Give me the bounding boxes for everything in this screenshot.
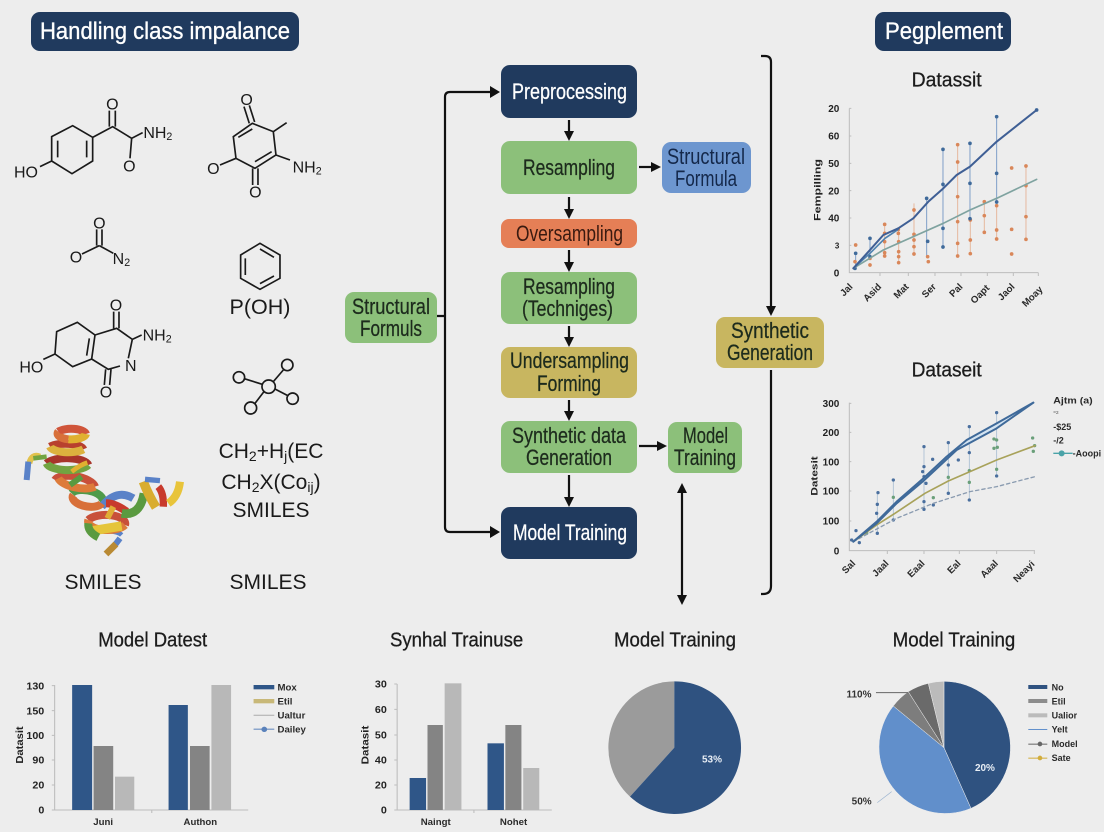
y labels: [823, 399, 840, 557]
x labels: [421, 817, 527, 827]
x labels: Jaol: [996, 282, 1017, 303]
legend: Dailey: [277, 725, 307, 735]
x labels: Oapt: [969, 282, 993, 306]
y labels: 100: [823, 517, 840, 528]
x labels: Eaal: [906, 558, 927, 580]
pie labels: 110%: [846, 689, 872, 700]
box: Synthetic Generation: [716, 317, 824, 368]
chart: Model Datest bars: [15, 628, 307, 827]
label: P(OH): P(OH): [230, 295, 290, 319]
molecule 1: HO: [14, 165, 38, 182]
formula text: 2: [249, 448, 257, 464]
box: Structural Formula: Formula: [675, 166, 738, 191]
back strands: [58, 429, 86, 434]
leader lines: [876, 691, 908, 694]
box: Model Training small: [668, 422, 742, 473]
pie slice: navy: [630, 681, 741, 814]
molecule 1: NH: [143, 125, 166, 142]
front strands: [68, 434, 86, 439]
y labels: 90: [32, 756, 45, 767]
molecule 2: [207, 92, 322, 201]
box: Preprocessing: Preprocessing: [512, 79, 627, 104]
y labels: [375, 680, 387, 817]
label: SMILES left: SMILES: [64, 571, 142, 594]
chart title: Datassit: [912, 69, 982, 92]
band between blue lines: [923, 403, 1033, 481]
y labels: 200: [823, 428, 840, 439]
chart title: Dataseit: [912, 359, 982, 382]
chart: Dataseit scatter line: [810, 359, 1101, 585]
dark blue line: [853, 110, 1037, 268]
x labels: [840, 558, 1037, 585]
molecule 7: protein ribbon: [27, 429, 180, 554]
box: Synthetic Generation: Synthetic: [731, 318, 809, 343]
x labels: Pal: [947, 282, 965, 300]
y labels: 3: [835, 241, 840, 250]
legend: Model: [1052, 739, 1078, 749]
y labels: 20: [828, 186, 840, 197]
box: Preprocessing: [501, 65, 637, 118]
molecule 1: 2: [166, 131, 172, 143]
arrow: Synthetic data to Model Training: [639, 441, 667, 451]
y labels: 0: [834, 546, 840, 557]
axes: [52, 685, 248, 813]
molecule 3: O: [93, 215, 106, 232]
legend: -$25: [1053, 422, 1071, 432]
y labels: 150: [26, 707, 45, 717]
molecule 5: O: [100, 384, 112, 401]
chart title: Model Training: [614, 629, 736, 652]
molecule 5: NH: [143, 328, 166, 345]
box: Resampling (Techniges): [501, 272, 637, 324]
molecule 1: [14, 97, 172, 182]
formula text: +H: [257, 440, 284, 463]
molecule 3: O: [70, 249, 82, 266]
pie slice: gray: [608, 681, 674, 797]
chart: Synhal Trainuse bars: [360, 628, 552, 827]
legend: -Aoopi: [1073, 449, 1101, 459]
y labels: 20: [375, 781, 387, 792]
y labels: 0: [834, 268, 840, 279]
x labels: Aaal: [979, 558, 1001, 581]
legend: -/2: [1053, 435, 1064, 445]
box: Structural Formuls: [345, 292, 437, 343]
title: Handling class impalance: Handling class impalance: [40, 18, 290, 45]
x labels: Mat: [892, 281, 912, 301]
box: Model Training small: Training: [674, 445, 736, 470]
x labels: Ser: [920, 281, 939, 300]
formula text: ij: [307, 479, 314, 495]
formula text: CH: [221, 471, 252, 494]
blue points: [852, 413, 997, 543]
arrow: Resampling to Structural Formula: [639, 162, 661, 172]
x labels: Authon: [184, 817, 217, 827]
label: SMILES right: SMILES: [229, 571, 307, 594]
box: Undersampling Forming: Forming: [537, 371, 601, 396]
molecule 1: O: [123, 159, 136, 176]
heading: Pegplement: Pegplement: [885, 18, 1003, 45]
box: Model Training small: Model: [683, 423, 728, 448]
pie slices: [879, 681, 1010, 813]
x labels: Asid: [862, 282, 884, 304]
heading: Pegplement: [875, 12, 1011, 51]
box: Resampling (Techniges): Resampling: [523, 274, 615, 299]
chart: Datassit scatter line: [813, 69, 1046, 310]
molecule 2: NH: [293, 160, 316, 177]
green points: [867, 438, 1035, 533]
molecule 2: 2: [316, 166, 322, 178]
axes: [849, 108, 1038, 276]
molecule 5: [19, 298, 172, 401]
orange points: [855, 145, 1026, 265]
molecule 3: [70, 215, 130, 269]
legend: Etil: [1052, 696, 1066, 706]
formula text: j: [283, 448, 287, 464]
x labels: [93, 817, 217, 827]
molecule 5: N: [125, 358, 137, 375]
connector: right bracket: [761, 56, 776, 594]
chart: Model Training multi pie: [846, 629, 1078, 813]
box: Structural Formula: [662, 142, 751, 193]
y labels: 30: [375, 680, 387, 691]
legend: Yelt: [1052, 725, 1068, 735]
molecule 2: O: [240, 92, 253, 109]
y labels: 60: [828, 132, 840, 143]
axes: [394, 684, 552, 813]
box: Resampling: Resampling: [523, 155, 615, 180]
pie label: 53%: [702, 754, 722, 765]
box: Synthetic data Generation: [501, 421, 637, 473]
chart title: Synhal Trainuse: [390, 628, 523, 651]
y axis title: Datasit: [15, 725, 26, 764]
x labels: Eal: [945, 558, 963, 576]
box: Model Training: Model Training: [513, 520, 627, 545]
title: Handling class impalance: [31, 12, 299, 51]
arrow: double headed vertical: [677, 483, 687, 605]
molecule 3: N: [113, 251, 124, 268]
formula text: X(Co: [260, 471, 307, 494]
y axis title: Datasit: [360, 725, 372, 764]
formula text: [219, 440, 323, 522]
bars group 2: [169, 685, 231, 810]
bars group 1: [410, 683, 461, 810]
legend: Ualtur: [277, 711, 306, 720]
arrows: vertical flow: [564, 120, 574, 507]
dashed line: [853, 477, 1035, 542]
legend: =2: [1053, 410, 1059, 415]
formula text: 2: [252, 479, 260, 495]
light blue line: [853, 229, 898, 268]
x labels: Jaal: [870, 558, 891, 579]
box: Oversampling: Oversampling: [516, 221, 623, 246]
y labels: 50: [375, 731, 387, 742]
y labels: 0: [38, 806, 45, 817]
x labels: Jal: [838, 282, 855, 299]
x labels: Sal: [840, 558, 858, 576]
y labels: 100: [26, 731, 45, 742]
box: Resampling: [501, 141, 637, 194]
molecule 6: network: [233, 359, 298, 414]
box: Undersampling Forming: Undersampling: [510, 348, 629, 373]
x labels: Moay: [1020, 284, 1046, 310]
legend: [1028, 682, 1078, 763]
panel: flowchart: [345, 56, 824, 605]
molecule 2: O: [207, 161, 220, 178]
x labels: Neayi: [1011, 559, 1037, 585]
blue line lower: [853, 403, 1033, 542]
y labels: 100: [823, 457, 840, 468]
x labels: Juni: [93, 817, 113, 827]
pie labels: 50%: [852, 797, 872, 808]
legend: [254, 683, 307, 735]
y labels: [828, 104, 840, 279]
pie labels: [846, 689, 995, 808]
box: Synthetic data Generation: Synthetic data: [512, 423, 627, 448]
legend: Etil: [277, 697, 292, 706]
pie labels: 20%: [975, 763, 995, 774]
box: Undersampling Forming: [501, 347, 637, 398]
formula text: ): [314, 471, 321, 494]
chart title: Model Datest: [98, 628, 207, 651]
box: Structural Formuls: Formuls: [360, 316, 422, 341]
y labels: 0: [381, 806, 387, 817]
molecule 4: benzene: [241, 243, 280, 289]
y labels: 20: [828, 104, 840, 115]
y labels: 60: [375, 705, 387, 716]
blue line upper: [853, 403, 1033, 542]
legend: Mox: [277, 683, 298, 693]
y labels: 300: [823, 399, 840, 410]
molecule 5: HO: [19, 360, 43, 377]
y labels: 100: [823, 487, 840, 498]
panel: molecule structures: [14, 92, 323, 594]
y axis title: Datesit: [810, 456, 820, 496]
y labels: 40: [375, 756, 387, 767]
error bars: [856, 117, 997, 267]
formula text: SMILES: [232, 499, 310, 522]
box: Resampling (Techniges): (Techniges): [522, 296, 613, 321]
bars group 1: [72, 685, 134, 810]
x labels: Naingt: [421, 817, 451, 827]
y labels: 50: [828, 159, 840, 170]
molecule 1: O: [106, 97, 119, 114]
molecule 5: O: [110, 298, 122, 315]
legend: Ajtm (a): [1053, 395, 1093, 405]
bars group 2: [487, 725, 539, 810]
box: Structural Formula: Structural: [667, 144, 745, 169]
y axis title: Fempilling: [813, 159, 823, 221]
y labels: 20: [32, 781, 45, 792]
axes: [849, 403, 1035, 554]
error bars: [877, 413, 997, 535]
y labels: 40: [828, 214, 840, 225]
formula text: CH: [219, 440, 249, 463]
box: Structural Formuls: Structural: [352, 294, 430, 319]
olive line: [853, 446, 1035, 542]
legend: Sate: [1052, 753, 1071, 763]
box: Synthetic Generation: Generation: [727, 340, 813, 365]
connector: left bus with arrows: [437, 86, 500, 538]
blue points: [855, 110, 1037, 268]
x labels: Nohet: [500, 817, 527, 827]
box: Synthetic data Generation: Generation: [526, 445, 612, 470]
x labels: [838, 281, 1046, 310]
formula text: (EC: [287, 440, 323, 463]
y labels: [26, 682, 45, 817]
chart title: Model Training: [893, 629, 1015, 652]
legend: [1053, 395, 1101, 459]
legend: Ualior: [1052, 711, 1078, 721]
chart: Model Training pie: [608, 629, 741, 814]
molecule 2: O: [249, 184, 262, 201]
box: Model Training: [501, 507, 637, 559]
y labels: 130: [26, 682, 45, 692]
molecule 3: 2: [124, 257, 130, 269]
molecule 5: 2: [166, 334, 172, 346]
teal line: [853, 179, 1037, 268]
legend: No: [1052, 682, 1064, 692]
